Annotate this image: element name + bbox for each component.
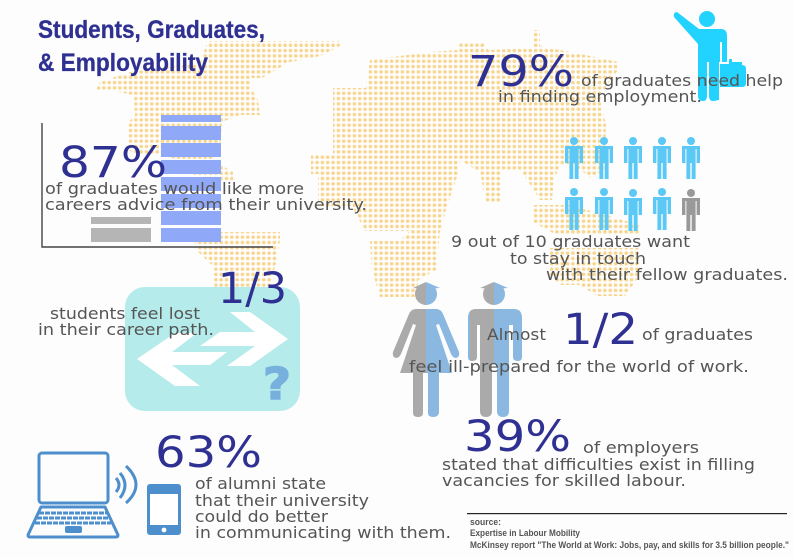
source note: Expertise in Labour Mobility — [470, 528, 580, 538]
caption: careers advice — [45, 179, 367, 214]
caption: careers advice: of graduates would like more — [45, 179, 304, 198]
icon: arrows box — [125, 287, 300, 411]
source note — [467, 513, 789, 550]
statistic: 1/3: 1/3 — [218, 264, 287, 314]
caption: employers: stated that difficulties exist in filling — [442, 455, 755, 474]
title: & Employability — [38, 49, 208, 77]
statistic: 63%: 63% — [155, 428, 262, 478]
title: Students, Graduates, — [38, 16, 265, 44]
icon: laptop, wifi and phone — [28, 453, 181, 537]
caption: lost: students feel lost — [50, 304, 200, 323]
statistic: 87%: 87% — [59, 138, 167, 188]
panel: stay in touch — [451, 137, 788, 284]
caption: need help: in finding employment. — [498, 87, 702, 106]
caption: lost — [38, 304, 214, 339]
statistic: 39%: 39% — [464, 412, 571, 462]
caption: ill-prepared — [409, 325, 753, 376]
panel: lost in career path — [38, 264, 300, 411]
caption: stay in touch: with their fellow graduates. — [546, 265, 788, 284]
panel: finding employment — [468, 11, 783, 106]
caption: alumni — [195, 474, 451, 542]
caption: employers — [442, 438, 755, 490]
panel: employers — [442, 412, 755, 490]
statistic: 1/2: 1/2 — [563, 305, 638, 355]
icon: person with briefcase — [674, 11, 746, 101]
caption: stay in touch: 9 out of 10 graduates want — [451, 232, 690, 251]
icon: ten people — [565, 137, 700, 231]
statistic: 79%: 79% — [468, 47, 574, 97]
caption: alumni: that their university — [195, 491, 369, 510]
icon: graduate couple — [393, 282, 522, 417]
panel: careers advice — [42, 115, 367, 247]
caption: employers: vacancies for skilled labour. — [442, 471, 686, 490]
caption: alumni: could do better — [195, 507, 328, 526]
panel: ill-prepared — [393, 282, 753, 417]
bar chart — [42, 115, 273, 247]
caption: almost: Almost — [487, 325, 546, 344]
caption: stay in touch: to stay in touch — [510, 249, 646, 268]
caption: careers advice: careers advice from their university. — [45, 195, 367, 214]
icon: arrows box: ? — [263, 359, 291, 410]
caption: employers: of employers — [583, 438, 699, 457]
caption: alumni: of alumni state — [195, 474, 326, 493]
source note: source: — [470, 517, 501, 527]
caption: lost: in their career path. — [38, 320, 214, 339]
title — [38, 16, 265, 77]
caption: need help — [498, 71, 783, 106]
panel: alumni — [28, 428, 451, 542]
caption: ill-prepared: of graduates — [642, 325, 753, 344]
caption: alumni: in communicating with them. — [195, 523, 451, 542]
caption: ill-prepared: feel ill-prepared for the world of work. — [409, 357, 749, 376]
caption: stay in touch — [451, 232, 788, 284]
caption: need help: of graduates need help — [581, 71, 783, 90]
world map dots — [96, 30, 640, 325]
